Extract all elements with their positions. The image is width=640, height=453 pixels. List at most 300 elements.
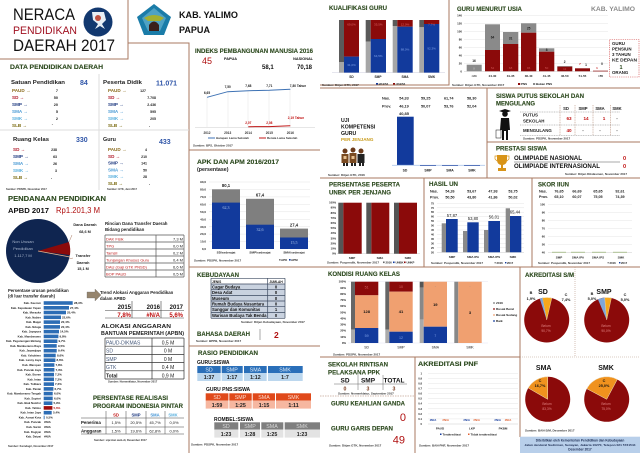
bar chart: skor iiun: 50 <box>542 242 545 246</box>
block: guru: 141 <box>141 162 147 166</box>
bar chart: persentase urusan pendidikan: #N/A <box>44 430 52 434</box>
legend: 2017 <box>621 261 628 265</box>
table: putus sekolah: SMA <box>595 106 605 111</box>
bar chart: persentase urusan pendidikan: 9,8% <box>60 334 67 338</box>
apbd value: Rp1.201,3 M <box>56 206 100 215</box>
bar chart: unbk: 20% <box>331 241 337 245</box>
block: guru: 28 <box>143 175 147 179</box>
table: rintisan: 0 <box>344 386 347 392</box>
bar chart: persentase urusan pendidikan: Kab. Intan Jaya <box>20 411 41 415</box>
table: guru siswa: 1:7 <box>281 375 289 381</box>
bar chart: hasil un: SMA IPS <box>488 255 500 259</box>
table: realisasi pip: 45,7% <box>149 420 161 425</box>
source: Sumber: BPPB, November 2017 <box>196 339 242 343</box>
panel: persentase unbk <box>327 182 420 264</box>
stacked bar chart: usia: 46-50 <box>561 74 569 78</box>
bar chart: persentase urusan pendidikan: #N/A <box>44 434 52 438</box>
panel: uji kompetensi guru <box>328 96 485 177</box>
bar chart: persentase urusan pendidikan: Kab. Mamberamo <box>18 334 41 338</box>
national and provincial values: 74,39 <box>615 195 625 199</box>
pie chart: apbd composition: 68,6 M <box>79 230 91 234</box>
stacked bar chart: kondisi: 40% <box>340 316 346 320</box>
block: ruang kelas: SLB → <box>13 175 28 180</box>
pie chart: apbd composition: Non Urusan <box>12 239 34 244</box>
bar chart: skor iiun: 80 <box>542 218 545 222</box>
bar chart: apk apm: 0,0 <box>202 247 206 251</box>
bar chart: persentase urusan pendidikan: 14,5% <box>60 330 69 334</box>
table: kebudayaan: Museum <box>212 296 229 301</box>
legend: 2017 <box>507 261 514 265</box>
chart: akreditasi pnf: 0.9 <box>418 376 422 380</box>
heading: PENDANAAN PENDIDIKAN <box>8 196 106 203</box>
bar chart: apk apm: SD/sederajat <box>217 250 235 254</box>
table: kebudayaan: 0 <box>275 290 278 295</box>
national and provincial values: 75,05 <box>593 195 603 199</box>
pie: smp: 5,0% <box>621 298 630 302</box>
national and provincial values: Nas. <box>539 190 547 194</box>
province and national values <box>224 57 314 71</box>
stacked bar chart: kondisi: 50% <box>340 310 346 314</box>
bar chart: unbk: 50% <box>331 226 337 230</box>
bar chart: uji kompetensi: SMK <box>468 168 476 172</box>
table: realisasi pip: SMK <box>168 412 178 418</box>
stacked bar chart: usia: 120 <box>457 21 462 25</box>
block: guru: SMK → <box>108 174 124 179</box>
table: rincian dana transfer: BOP PAUD <box>106 272 126 276</box>
stacked bar chart: kondisi: 30% <box>340 322 346 326</box>
table: realisasi pip: Anggaran <box>81 428 102 434</box>
bar chart: apk apm: 27,4 <box>290 222 299 228</box>
bar chart: persentase urusan pendidikan: Kab. Yahukimo <box>21 354 41 358</box>
pie: sma: Belum <box>542 402 552 406</box>
bar chart: persentase urusan pendidikan: 22,4% <box>61 320 70 324</box>
table: guru siswa: SMA <box>250 368 262 374</box>
subheading: (persentase) <box>197 167 229 173</box>
national and provincial values: 41,86 <box>488 196 498 200</box>
block: ruang kelas <box>13 137 88 180</box>
line chart: lama sekolah: 2016 <box>287 131 294 135</box>
pie chart: apbd composition: Pendidikan <box>13 246 33 251</box>
bar chart: persentase urusan pendidikan <box>6 288 83 438</box>
stacked bar chart: usia: 80 <box>459 37 462 41</box>
source: Sumber: Puspendik, November 2017 <box>431 261 483 265</box>
bar chart: persentase urusan pendidikan: 7,2% <box>55 377 62 381</box>
legend <box>493 301 517 323</box>
heading: AKREDITASI S/M <box>525 272 574 279</box>
stacked bar chart: usia: 31 <box>509 36 513 40</box>
line chart: lama sekolah: 2012 <box>203 131 211 135</box>
rank value: 45 <box>202 56 212 66</box>
bar chart: skor iiun: 90 <box>542 210 545 214</box>
stacked bar chart: usia: >55 <box>598 74 603 78</box>
bar chart: persentase urusan pendidikan: 5,6% <box>54 406 61 410</box>
bar chart: persentase urusan pendidikan: Kab. Mamberamo Tengah <box>7 392 41 396</box>
pie: smk: C <box>603 379 606 383</box>
line chart: lama sekolah <box>195 84 315 140</box>
stacked bar chart: kualifikasi: 69,0% <box>347 22 356 26</box>
national and provincial values: 53,67 <box>467 190 476 194</box>
callout: guru pensiun: GURU <box>612 41 625 46</box>
pie: smk: 75,0% <box>601 407 611 411</box>
stacked bar chart: kualifikasi: 64,5% <box>374 54 383 58</box>
panel: sekolah rintisan ppk <box>328 362 407 396</box>
stacked bar chart: kualifikasi <box>332 20 445 79</box>
stacked bar chart: usia: 50 <box>545 66 549 70</box>
legend: PNS <box>521 82 527 86</box>
line chart: lama sekolah: 2,07 <box>245 121 252 125</box>
footer: publisher note: Desember 2017 <box>568 448 592 452</box>
stacked bar chart: kondisi: SMP <box>397 346 405 350</box>
bar chart: unbk: SMP <box>349 256 355 260</box>
pie: sma <box>525 365 570 422</box>
bar chart: apk apm: 20,0 <box>200 232 206 236</box>
legend: ≥D4/S1 <box>378 82 389 86</box>
title: pendidikan: PENDIDIKAN <box>13 25 77 37</box>
stacked bar chart: usia: 140 <box>457 13 462 17</box>
pie: smk <box>584 365 629 422</box>
line chart: lama sekolah: 2014 <box>245 131 252 135</box>
pie: sd: Belum <box>541 324 551 328</box>
bar chart: persentase urusan pendidikan: Kab. Puncak Jaya <box>17 368 41 372</box>
heading: PELAKSANA PPK <box>328 370 380 376</box>
bar chart: persentase urusan pendidikan: Kab. Deiyai <box>26 434 41 438</box>
heading: AKREDITASI PNF <box>418 361 478 368</box>
stacked bar chart: kualifikasi: SMK <box>428 75 436 79</box>
source: Sumber: Ditjen GTK, 2016 <box>328 173 365 177</box>
table: realisasi pip: 0,0% <box>169 420 179 425</box>
heading: KONDISI RUANG KELAS <box>328 271 400 278</box>
table: trend alokasi anggaran: dalam APBD <box>100 296 126 301</box>
block: ruang kelas: 26 <box>53 162 57 166</box>
chart: akreditasi pnf: 0.8 <box>418 381 422 385</box>
national and provincial values: 52,04 <box>467 104 477 108</box>
bar chart: persentase urusan pendidikan: (di luar transfer daerah) <box>8 294 56 298</box>
stacked bar chart: usia: 31-35 <box>507 74 515 78</box>
table: trend alokasi anggaran: 5,6% <box>169 313 184 319</box>
block: ruang kelas: 330 <box>76 137 88 144</box>
panel: skor iiun <box>538 182 632 265</box>
bar chart: unbk: 90% <box>331 206 337 210</box>
heading: HASIL UN <box>429 181 458 188</box>
table: rombel siswa: SMA <box>266 424 278 430</box>
stacked bar chart: kualifikasi: 88,0% <box>401 48 410 52</box>
table: kebudayaan <box>211 278 285 318</box>
bar chart: persentase urusan pendidikan: Kab. Paniai <box>26 387 41 391</box>
national and provincial values: 47,93 <box>488 190 498 194</box>
pie: smk: SMK <box>598 365 614 372</box>
table: realisasi pip: 1,5% <box>111 420 121 425</box>
pie: sd <box>524 289 571 342</box>
legend: 2016 <box>496 261 503 265</box>
table: kebudayaan: 1 <box>275 307 278 312</box>
national and provincial values: Nas. <box>382 96 390 100</box>
table: kebudayaan: JUMLAH <box>269 280 283 284</box>
bar chart: apk apm: SMP/sederajat <box>249 250 271 254</box>
subheading: PER JENJANG <box>341 137 374 142</box>
table: rincian dana transfer: 0,0 M <box>173 244 183 248</box>
block: peserta didik: SMA → <box>108 109 124 114</box>
table: realisasi pip <box>81 395 184 442</box>
bar chart: hasil un: 30 <box>431 241 434 245</box>
pie: smp: 90,0% <box>601 329 611 333</box>
bar chart: apk apm: 60,0 <box>200 202 206 206</box>
stacked bar chart: kondisi: SMK <box>466 346 474 350</box>
table: guru siswa: GURU:SISWA <box>197 360 230 366</box>
table: guru pns siswa <box>206 387 311 409</box>
block: satuan pendidikan <box>11 80 88 128</box>
bar chart: persentase urusan pendidikan: 8,6% <box>57 354 64 358</box>
table: putus sekolah: 40 <box>566 128 572 133</box>
block: guru: 433 <box>159 139 171 146</box>
panel: bahasa daerah <box>196 329 279 343</box>
table: realisasi pip: 0,0% <box>169 428 179 434</box>
bar chart: uji kompetensi: 40,85 <box>399 111 410 116</box>
bar chart: unbk: SMA <box>377 256 384 260</box>
table: trend alokasi anggaran: 7,8% <box>117 313 132 319</box>
bar chart: apk apm: 90,0 <box>200 180 206 184</box>
bar chart: skor iiun: SMP <box>556 256 562 260</box>
bar chart: skor iiun: SMA IPA <box>572 256 585 260</box>
bar chart: persentase urusan pendidikan: Kab. Tolikara <box>24 382 41 386</box>
table: putus sekolah: - <box>616 116 618 121</box>
province and national values: PAPUA <box>224 57 237 61</box>
heading <box>329 182 400 196</box>
table: guru pns siswa: SD <box>213 395 221 401</box>
bar chart: persentase urusan pendidikan: Kab. Biak Numfor <box>18 401 42 405</box>
legend: UNBK <box>396 260 404 264</box>
table: kebudayaan: Warisan Budaya Tak Benda <box>212 313 267 318</box>
region name <box>179 10 238 36</box>
table: rincian dana transfer: Bidang pendidikan <box>105 227 145 232</box>
panel: pendanaan pendidikan <box>6 196 184 448</box>
bar chart: uji kompetensi: SD <box>403 168 408 172</box>
chart: akreditasi pnf: 0.6 <box>418 392 422 396</box>
panel: akreditasi pnf <box>418 361 518 448</box>
source: Sumber: Ditjen Kebudayaan, November 2017 <box>241 320 305 324</box>
line chart: lama sekolah: 7,71 <box>266 84 273 88</box>
pie chart: apbd composition <box>6 219 97 283</box>
label: regency top right: KAB. YALIMO <box>591 6 635 13</box>
table: rintisan: SMP <box>361 378 376 384</box>
stacked bar chart: usia: 100 <box>457 29 462 33</box>
bar chart: unbk: 0% <box>332 252 337 256</box>
source: kemdagri: Sumber: Kemdagri, November 2017 <box>8 444 54 448</box>
panel: guru garis depan <box>329 426 405 448</box>
source notes <box>6 187 138 191</box>
national and provincial values: 59,25 <box>421 96 430 100</box>
block: ruang kelas: SMP → <box>13 154 29 159</box>
table: realisasi pip: SMP <box>131 412 141 418</box>
stacked bar chart: kualifikasi: 35,5% <box>374 22 383 26</box>
pie: sd: C <box>565 293 568 297</box>
table: rincian dana transfer: Tunjangan Khusus Guru <box>106 258 149 262</box>
stacked bar chart: usia: 64 <box>491 36 494 40</box>
bar chart: persentase urusan pendidikan: Kab. Nabire <box>25 315 41 319</box>
table: alokasi anggaran apbn: GTK <box>106 365 117 371</box>
stacked bar chart: kondisi: 10 <box>399 285 403 289</box>
block: ruang kelas: SMK → <box>13 168 29 173</box>
bar chart: persentase urusan pendidikan: Kab. Kepulauan Yapen <box>11 306 41 310</box>
bar chart: hasil un: SMK <box>510 255 517 259</box>
bar chart: persentase urusan pendidikan: 0,5% <box>46 416 53 420</box>
table: kebudayaan: Desa Adat <box>212 290 233 295</box>
bar chart: persentase urusan pendidikan: 6,7% <box>54 387 62 391</box>
source: Sumber: PDSPK, November 2017 <box>191 442 239 446</box>
bar chart: skor iiun: SMK <box>618 256 625 260</box>
stacked bar chart: kualifikasi: 92,3% <box>427 46 436 50</box>
block: peserta didik: SMK → <box>108 116 124 121</box>
table: putus sekolah: SEKOLAH <box>523 118 544 124</box>
bar chart: persentase urusan pendidikan: Kab. Supiori <box>25 396 41 400</box>
bar chart: hasil un: 45 <box>431 228 434 232</box>
block: guru: 210 <box>141 155 147 159</box>
table: rombel siswa: 1:23 <box>297 432 307 438</box>
footer: publisher note: Jalan Jenderal Sudirman, Senayan, Jakarta 10270, Telepon 021 5731544 <box>524 443 636 447</box>
table: rincian dana transfer: TPG <box>106 244 114 248</box>
heading: UNBK PER JENJANG <box>329 190 391 196</box>
pie: smp: 5,0% <box>588 297 597 301</box>
legend: Tidak terakreditasi <box>470 432 497 436</box>
stacked bar chart: usia: 24-30 <box>489 74 497 78</box>
table: rombel siswa: SD <box>222 424 230 430</box>
table: putus sekolah: 63 <box>566 116 572 121</box>
table: realisasi pip: 20,5% <box>130 420 142 425</box>
pie chart: apbd composition: Dana Daerah <box>73 223 97 227</box>
panel: akreditasi s/m <box>524 272 630 432</box>
table: trend alokasi anggaran: #N/A <box>146 313 161 319</box>
national and provincial values <box>539 190 625 199</box>
table: rombel siswa: ROMBEL:SISWA <box>214 417 254 423</box>
panel: indeks pembangunan manusia <box>193 48 315 148</box>
table: rintisan: 3 <box>367 386 370 392</box>
table: alokasi anggaran apbn: 0 M <box>164 357 172 363</box>
stacked bar chart: usia: 2 <box>564 60 566 64</box>
callout: guru pensiun <box>610 40 639 77</box>
stacked bar chart: kondisi: 3 <box>469 310 472 315</box>
table: realisasi pip: 19,6% <box>130 428 142 434</box>
legend: Baik <box>496 319 503 323</box>
legend <box>494 261 514 265</box>
table: guru pns siswa: SMP <box>235 395 247 401</box>
rows: olimpiade: 0 <box>623 164 626 170</box>
table: trend alokasi anggaran <box>100 290 184 319</box>
heading <box>496 93 585 108</box>
stacked bar chart: usia: 0 <box>460 69 462 73</box>
source: Sumber: PDSPK, November 2017 <box>333 352 381 356</box>
bar chart: skor iiun: SMA IPS <box>592 256 604 260</box>
table: trend alokasi anggaran: 2015 <box>118 305 132 311</box>
line chart: lama sekolah: 7,50 <box>225 85 231 89</box>
bar chart: persentase urusan pendidikan: Kab. Dogiyai <box>24 430 41 434</box>
bar chart: persentase urusan pendidikan: Kab. Waropen <box>22 363 41 367</box>
legend <box>376 82 406 86</box>
bar chart: skor iiun: 70 <box>542 226 545 230</box>
stacked bar chart: usia: 40 <box>459 53 462 57</box>
pie: sd: SD <box>538 289 548 296</box>
bar chart: persentase urusan pendidikan: Kab. Jayawijaya <box>20 349 41 353</box>
rows: olimpiade <box>514 156 626 170</box>
source: Sumber: BAN-S/M, Desember 2017 <box>525 428 575 432</box>
callout: guru pensiun: KE DEPAN <box>612 58 637 62</box>
chart: akreditasi pnf: LKP <box>469 426 475 430</box>
bar chart: persentase urusan pendidikan: Kab. Merauke <box>23 310 41 314</box>
national and provincial values: 76,65 <box>554 190 564 194</box>
block: satuan pendidikan: SMK → <box>12 116 28 121</box>
block: satuan pendidikan: 2 <box>56 117 58 121</box>
heading: GURU MENURUT USIA <box>457 7 523 13</box>
line chart: lama sekolah: 2013 <box>224 131 231 135</box>
stacked bar chart: usia: 20 <box>459 61 462 65</box>
bar chart: apk apm <box>200 180 310 254</box>
bar chart: skor iiun: 60 <box>542 234 545 238</box>
bar chart: hasil un: 56,01 <box>489 214 500 220</box>
bar chart: persentase urusan pendidikan: 5,4% <box>53 411 60 415</box>
bar chart: persentase urusan pendidikan: #N/A <box>44 425 52 429</box>
source: Sumber: PDSPK, November 2017 <box>523 136 571 140</box>
pie: smp: B <box>591 292 594 296</box>
table: guru pns siswa: 1:15 <box>259 403 269 409</box>
bar chart: apk apm: 80,0 <box>200 188 206 192</box>
block: peserta didik: 595 <box>150 110 156 114</box>
callout: guru pensiun: 1 <box>619 65 623 71</box>
stacked bar chart: kondisi: 19 <box>433 302 438 307</box>
table: putus sekolah: SMK <box>612 106 622 111</box>
table: guru siswa: SD <box>205 368 213 374</box>
table: rincian dana transfer: 0,5 M <box>173 272 183 276</box>
block: peserta didik: 205 <box>150 117 156 121</box>
block: peserta didik: SD → <box>108 95 120 100</box>
block: guru: SD → <box>108 154 120 159</box>
legend: 2016 <box>496 301 503 305</box>
table: guru siswa: SMK <box>279 368 291 374</box>
table: putus sekolah: PUTUS <box>523 112 538 118</box>
table: kebudayaan: Sanggar dan Komunitas <box>212 307 261 312</box>
block: guru <box>103 137 171 186</box>
bar chart: uji kompetensi: SMA <box>446 168 454 172</box>
table: trend alokasi anggaran: 2017 <box>170 305 184 311</box>
icon: ministry logo <box>84 8 112 36</box>
table: alokasi anggaran apbn: Total <box>106 373 118 379</box>
block: peserta didik: 127 <box>140 89 146 93</box>
source: Sumber: Ditjen GTK, November 2017 <box>452 83 505 87</box>
block: guru: Guru <box>103 137 116 143</box>
table: rombel siswa: SMP <box>244 424 256 430</box>
heading: UJI <box>341 118 350 124</box>
footer: publisher note <box>520 437 640 453</box>
bar chart: persentase urusan pendidikan: 22,6% <box>62 315 71 319</box>
bar chart: persentase urusan pendidikan: 9,4% <box>58 349 65 353</box>
bar chart: apk apm: 30,0 <box>200 225 206 229</box>
stacked bar chart: kondisi: 100% <box>339 280 346 284</box>
stacked bar chart: usia: <24 <box>471 74 477 78</box>
bar chart: hasil un: SMP <box>449 255 455 259</box>
bar chart: persentase urusan pendidikan: #N/A <box>44 420 52 424</box>
pie chart: apbd composition: 1.117,7 M <box>14 253 32 258</box>
legend: Bukan PNS <box>536 82 552 86</box>
heading: SKOR IIUN <box>538 182 569 188</box>
apbd title: APBD 2017 <box>8 206 49 215</box>
pie chart: apbd composition: 15,1 M <box>77 267 89 271</box>
stacked bar chart: kondisi: 128 <box>363 309 371 314</box>
table: kebudayaan: JENIS <box>212 280 221 284</box>
bar chart: apk apm: 67,4 <box>256 192 265 198</box>
heading: KOMPETENSI <box>341 124 376 130</box>
heading: PERSENTASE PESERTA <box>329 182 400 188</box>
heading: INDEKS PEMBANGUNAN MANUSIA 2016 <box>195 48 314 55</box>
chart: akreditasi pnf: 1 <box>420 371 422 375</box>
chart: akreditasi pnf: #N/A <box>494 418 502 422</box>
table: kebudayaan: 0 <box>275 296 278 301</box>
